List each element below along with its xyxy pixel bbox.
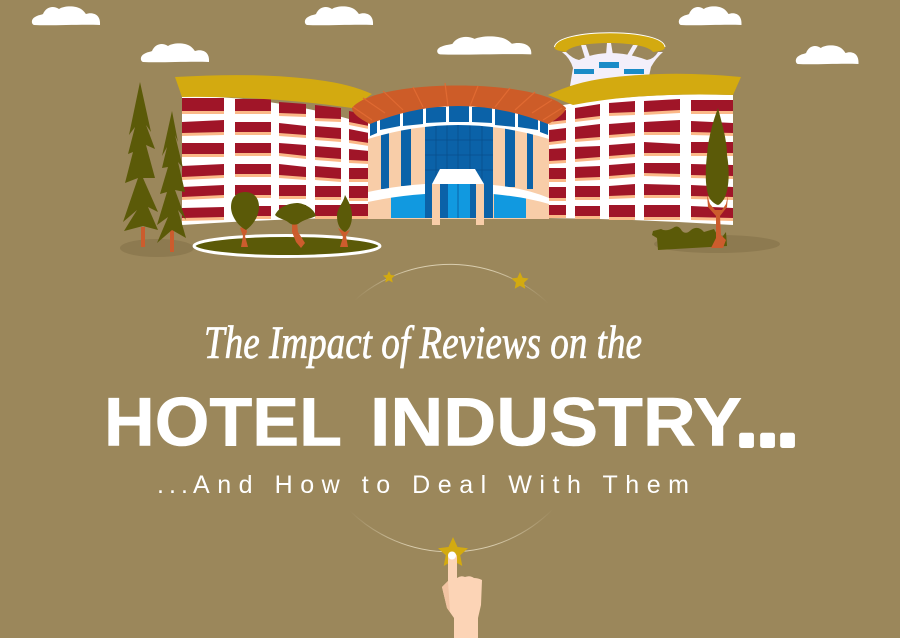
entrance <box>432 169 484 225</box>
right wing windows <box>549 99 733 218</box>
lower white bands <box>368 184 549 204</box>
side window strips <box>381 127 533 189</box>
right wing roof <box>548 74 741 105</box>
helipad ring highlight <box>554 33 665 47</box>
top decorative arc <box>355 264 548 303</box>
main heading: HOTEL <box>104 384 342 460</box>
left pine tree <box>123 82 158 247</box>
entrance door <box>440 184 476 218</box>
left wing window sills <box>182 101 369 221</box>
finger glow <box>448 552 456 560</box>
left wing <box>175 75 372 225</box>
helipad windows <box>574 62 644 74</box>
central building body <box>368 120 549 219</box>
second pine tree <box>157 111 186 252</box>
pointing hand <box>442 552 482 638</box>
clouds <box>32 6 859 64</box>
tower body <box>562 52 663 86</box>
lawn oval <box>194 236 380 256</box>
small star <box>383 271 395 282</box>
slim garden tree <box>337 195 352 247</box>
bush <box>652 227 727 250</box>
band windows <box>370 106 548 136</box>
cloud 4 <box>437 36 531 55</box>
central glass atrium <box>425 122 493 218</box>
lobby glass <box>391 193 526 218</box>
script heading: The Impact of Reviews on the <box>204 317 642 369</box>
main heading <box>104 384 797 460</box>
entrance columns <box>432 184 484 225</box>
cloud 3 <box>305 6 373 25</box>
main heading: INDUSTRY <box>370 384 742 460</box>
bottom decorative arc <box>350 509 553 552</box>
subheading: ... <box>157 471 188 499</box>
right wing wall <box>546 95 733 225</box>
right ground shadow <box>654 235 780 253</box>
flat garden tree <box>275 203 316 248</box>
cloud 6 <box>796 45 859 64</box>
helipad ring <box>554 33 665 52</box>
upper arched band <box>368 106 549 139</box>
helipad struts <box>581 43 638 58</box>
entrance canopy <box>432 169 484 184</box>
cloud 2 <box>141 43 209 62</box>
subheading: And How to Deal With Them <box>193 471 689 499</box>
right wing window sills <box>549 102 733 221</box>
rating star <box>438 537 468 566</box>
central building <box>352 83 566 225</box>
right wing <box>546 74 741 225</box>
main heading: ... <box>737 384 797 460</box>
round garden tree <box>231 192 259 247</box>
helipad tower <box>554 33 665 86</box>
orange dome roof <box>352 83 566 124</box>
left wing roof <box>175 75 372 108</box>
cloud 1 <box>32 6 100 25</box>
left ground shadow <box>120 239 194 257</box>
cloud 5 <box>679 6 742 25</box>
large star <box>511 272 529 289</box>
left wing wall <box>182 96 372 225</box>
cypress tree <box>706 108 729 248</box>
left wing windows <box>182 98 369 218</box>
